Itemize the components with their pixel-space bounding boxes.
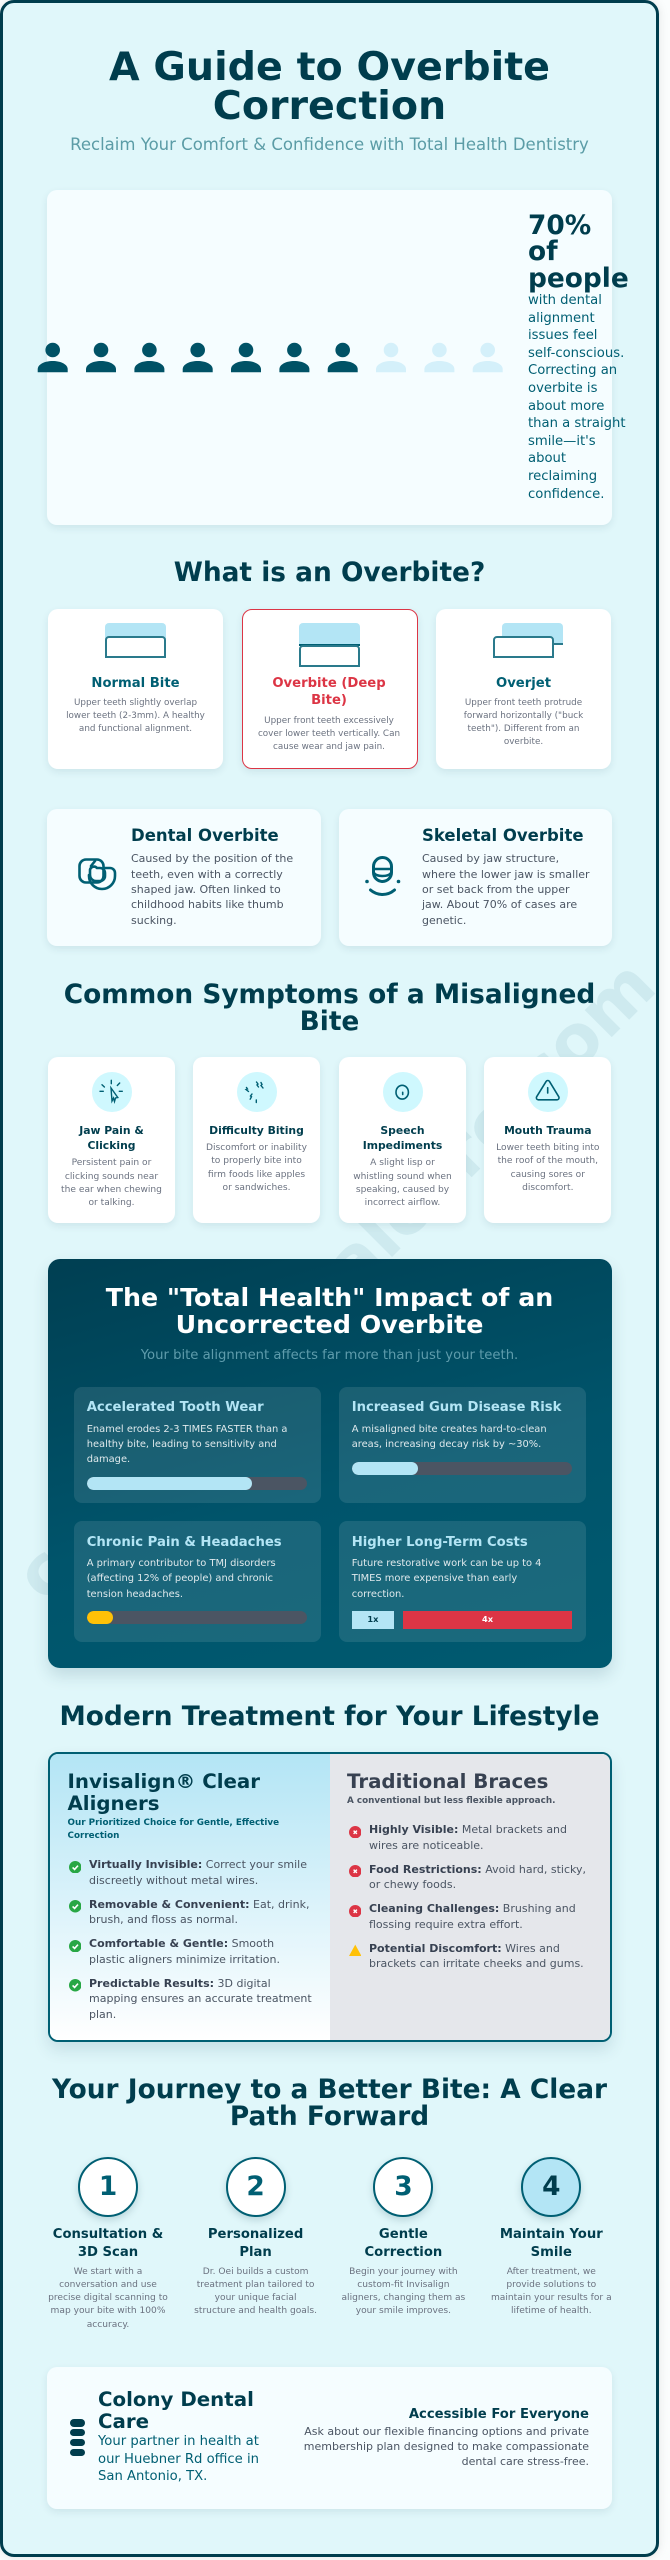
statistic text: about more xyxy=(528,399,604,414)
description xyxy=(352,1424,547,1450)
statistic headline: of xyxy=(528,236,558,267)
drawback: Potential Discomfort: Wires and xyxy=(369,1942,560,1955)
benefit xyxy=(69,1858,307,1887)
number badge: 3 xyxy=(394,2171,413,2202)
description xyxy=(353,1158,452,1208)
description: Upper front teeth protrude xyxy=(465,698,582,708)
infographic frame: colonydentalcare.com xyxy=(0,944,659,1616)
card: mouth trauma xyxy=(484,1057,611,1223)
description: provide solutions to xyxy=(506,2280,596,2290)
number badge xyxy=(78,2157,138,2217)
description: Persistent pain or xyxy=(72,1158,151,1168)
practice location: San Antonio, TX. xyxy=(98,2469,207,2484)
card: tooth wear xyxy=(74,1387,320,1503)
heading: Maintain Your xyxy=(500,2227,603,2242)
statistic text xyxy=(528,293,626,502)
description: Upper teeth slightly overlap xyxy=(74,698,197,708)
heading: journey xyxy=(52,2074,607,2132)
practice location: our Huebner Rd office in xyxy=(98,2452,259,2467)
card: overjet xyxy=(436,609,611,769)
number badge xyxy=(226,2157,286,2217)
description xyxy=(86,1558,276,1600)
heading: common symptoms xyxy=(64,979,595,1037)
heading: Bite) xyxy=(311,693,347,708)
benefit: discreetly without metal wires. xyxy=(89,1874,258,1887)
description: forward horizontally ("buck xyxy=(464,711,583,721)
description xyxy=(131,852,293,927)
statistic text: overbite is xyxy=(528,381,597,396)
practice location: Your partner in health at xyxy=(98,2434,259,2449)
description xyxy=(422,852,590,927)
drawback: Highly Visible: Metal brackets and xyxy=(369,1823,567,1836)
description: discomfort. xyxy=(522,1183,574,1193)
heading xyxy=(68,1770,260,1815)
subheading: Our Prioritized Choice for Gentle, Effective xyxy=(68,1818,279,1828)
panel: dental overbite xyxy=(47,809,321,946)
number badge: 2 xyxy=(246,2171,265,2202)
panel: skeletal overbite xyxy=(338,809,612,946)
description: maintain your results for a xyxy=(491,2293,612,2303)
card: gum disease xyxy=(338,1387,586,1503)
heading xyxy=(38,2226,178,2261)
benefit: Predictable Results: 3D digital xyxy=(89,1977,271,1990)
heading: Uncorrected Overbite xyxy=(176,1310,483,1339)
heading: journey: Path Forward xyxy=(230,2101,429,2132)
pictogram: 7 of 10 people xyxy=(38,342,503,372)
panel: total health impact xyxy=(48,1259,612,1668)
accessibility text: dental care stress-free. xyxy=(462,2455,589,2468)
step 4 xyxy=(481,2157,621,2339)
description: healthy bite, leading to sensitivity and xyxy=(87,1439,277,1450)
accessibility text: Ask about our flexible financing options and private xyxy=(304,2425,589,2438)
description: aligners, changing them as xyxy=(341,2293,465,2303)
heading: Aligners xyxy=(68,1792,160,1815)
description xyxy=(186,2266,326,2318)
description: childhood habits like thumb xyxy=(131,898,284,911)
statistic headline: 70% xyxy=(528,210,591,241)
statistic text: self-conscious. xyxy=(528,346,624,361)
statistic text: smile—it's xyxy=(528,434,596,449)
description: A misaligned bite creates hard-to-clean xyxy=(352,1424,547,1434)
heading xyxy=(186,2226,326,2261)
description: your smile improves. xyxy=(356,2306,451,2316)
icon: jaw xyxy=(365,856,400,896)
heading: journey: Your Journey to a Better Bite: A Clear xyxy=(52,2074,607,2105)
drawback: brackets can irritate cheeks and gums. xyxy=(369,1957,584,1970)
heading: 3D Scan xyxy=(78,2245,138,2260)
number badge xyxy=(373,2157,433,2217)
description: lower teeth (2-3mm). A healthy xyxy=(66,711,205,721)
number badge: 4 xyxy=(542,2171,560,2202)
heading: Gentle xyxy=(379,2227,428,2242)
drawback: flossing require extra effort. xyxy=(369,1918,523,1931)
description: conversation and use xyxy=(59,2280,157,2290)
subheading xyxy=(68,1818,279,1841)
statistic text: Correcting an xyxy=(528,363,617,378)
subheading: A conventional but less flexible approach. xyxy=(347,1796,555,1806)
statistic headline: people xyxy=(528,263,629,294)
benefit: plastic aligners minimize irritation. xyxy=(89,1953,280,1966)
description: incorrect airflow. xyxy=(365,1198,440,1208)
drawback: or chewy foods. xyxy=(369,1878,456,1891)
practice name: Care xyxy=(98,2410,149,2433)
description: overbite. xyxy=(504,737,543,747)
benefit: plan. xyxy=(89,2008,116,2021)
heading: what is an overbite: What is an Overbite? xyxy=(174,557,485,588)
description: lifetime of health. xyxy=(511,2306,592,2316)
description: Dr. Oei builds a custom xyxy=(203,2267,308,2277)
heading xyxy=(481,2226,621,2261)
heading: Mouth Trauma xyxy=(504,1124,592,1137)
icon: logo xyxy=(70,2419,85,2457)
step 1 xyxy=(48,2157,168,2330)
heading: common symptoms: Bite xyxy=(300,1006,359,1037)
description: TIMES more expensive than early xyxy=(352,1573,517,1584)
description: genetic. xyxy=(422,914,466,927)
heading: Overbite (Deep xyxy=(272,676,386,691)
description xyxy=(66,698,205,734)
icon: teeth xyxy=(78,858,116,890)
description: clicking sounds near xyxy=(65,1172,158,1182)
panel: treatment comparison xyxy=(48,1752,612,2042)
heading: Normal Bite xyxy=(91,676,180,690)
benefit: brush, and floss as normal. xyxy=(89,1913,238,1926)
progress bar 75% xyxy=(87,1477,307,1490)
statistic text: issues feel xyxy=(528,328,597,343)
statistic text: reclaiming xyxy=(528,469,597,484)
description: A slight lisp or xyxy=(370,1158,435,1168)
progress bar 30% xyxy=(352,1462,572,1475)
benefit: Removable & Convenient: Eat, drink, xyxy=(89,1898,309,1911)
description: Discomfort or inability xyxy=(206,1143,307,1153)
description: firm foods like apples xyxy=(208,1170,305,1180)
heading: Personalized xyxy=(208,2227,303,2242)
heading: Dental Overbite xyxy=(131,826,279,845)
benefit xyxy=(69,1898,309,1926)
icon: jaw pain xyxy=(92,1072,132,1112)
description: your unique facial xyxy=(215,2293,296,2303)
icon: warning xyxy=(528,1072,568,1112)
title: A Guide to Overbite xyxy=(109,44,550,90)
heading: common symptoms: Common Symptoms of a Misaligned xyxy=(64,979,595,1010)
cost bar 4x: 4x xyxy=(482,1614,493,1624)
description: causing sores or xyxy=(511,1170,585,1180)
description: to properly bite into xyxy=(211,1156,302,1166)
icon: speech xyxy=(383,1072,422,1112)
statistic headline xyxy=(528,210,629,294)
card: difficulty biting xyxy=(193,1057,320,1223)
benefit: mapping ensures an accurate treatment xyxy=(89,1992,312,2005)
description: the ear when chewing xyxy=(61,1185,162,1195)
description: map your bite with 100% xyxy=(51,2306,165,2316)
heading: Higher Long-Term Costs xyxy=(352,1535,528,1550)
cost bar 1x: 1x xyxy=(367,1614,378,1624)
description xyxy=(496,1143,599,1193)
heading: modern treatment: Modern Treatment for Your Lifestyle xyxy=(60,1700,599,1732)
description: (affecting 12% of people) and chronic xyxy=(87,1573,273,1584)
heading: Speech xyxy=(380,1124,425,1137)
drawback: Food Restrictions: Avoid hard, sticky, xyxy=(369,1863,586,1876)
description: the roof of the mouth, xyxy=(498,1156,598,1166)
step 3 xyxy=(333,2157,473,2339)
description xyxy=(61,1158,162,1208)
description xyxy=(258,716,400,752)
description: Enamel erodes 2-3 TIMES FASTER than a xyxy=(87,1424,287,1434)
description xyxy=(38,2266,178,2332)
description xyxy=(87,1424,287,1465)
drawback xyxy=(349,1902,576,1931)
title xyxy=(109,44,550,129)
description: structure and health goals. xyxy=(194,2306,317,2316)
benefit xyxy=(69,1937,280,1966)
description: and functional alignment. xyxy=(79,724,192,734)
accessibility text: membership plan designed to make compassionate xyxy=(304,2440,589,2453)
cost bar 1x xyxy=(352,1611,394,1629)
heading: Increased Gum Disease Risk xyxy=(352,1400,561,1415)
card: chronic pain xyxy=(74,1521,320,1642)
statistic text: alignment xyxy=(528,311,595,326)
heading xyxy=(106,1283,553,1339)
description: jaw. About 70% of cases are xyxy=(422,898,577,911)
heading: Overjet xyxy=(496,676,551,690)
description: whistling sound when xyxy=(353,1172,452,1182)
description: correction. xyxy=(352,1589,404,1600)
benefit: Comfortable & Gentle: Smooth xyxy=(89,1937,274,1950)
heading: Impediments xyxy=(363,1139,442,1152)
heading xyxy=(78,1124,144,1152)
heading: Correction xyxy=(364,2245,442,2260)
description: cover lower teeth vertically. Can xyxy=(258,729,400,739)
benefit: Virtually Invisible: Correct your smile xyxy=(89,1858,307,1871)
card: overbite xyxy=(242,609,418,769)
diagram: overjet xyxy=(493,623,563,658)
panel: footer xyxy=(47,2367,612,2509)
benefit xyxy=(69,1977,312,2021)
description: where the lower jaw is smaller xyxy=(422,868,590,881)
statistic text: with dental xyxy=(528,293,602,308)
number badge: 1 xyxy=(99,2171,117,2202)
description xyxy=(206,1143,307,1193)
practice name: Colony Dental xyxy=(98,2388,254,2411)
description: precise digital scanning to xyxy=(48,2293,168,2303)
description xyxy=(333,2266,473,2318)
description: teeth"). Different from an xyxy=(468,724,579,734)
card: speech impediments xyxy=(339,1057,466,1223)
progress bar 12% xyxy=(87,1611,307,1624)
heading: Accelerated Tooth Wear xyxy=(87,1400,264,1415)
description: We start with a xyxy=(74,2267,142,2277)
description: or talking. xyxy=(88,1198,135,1208)
drawback xyxy=(349,1942,584,1970)
heading: Traditional Braces xyxy=(347,1770,548,1793)
practice location xyxy=(98,2433,259,2486)
heading xyxy=(272,676,386,708)
description: custom-fit Invisalign xyxy=(357,2280,450,2290)
drawback: Cleaning Challenges: Brushing and xyxy=(369,1902,576,1915)
statistic text: about xyxy=(528,451,566,466)
column: traditional braces xyxy=(330,1754,610,2040)
description: sucking. xyxy=(131,914,177,927)
description xyxy=(352,1558,541,1600)
subheading: Your bite alignment affects far more than just your teeth. xyxy=(141,1348,518,1363)
subheading: Correction xyxy=(68,1831,119,1841)
subtitle: Reclaim Your Comfort & Confidence with Total Health Dentistry xyxy=(70,134,589,154)
accessibility text xyxy=(304,2424,589,2470)
drawback: wires are noticeable. xyxy=(369,1839,484,1852)
description: tension headaches. xyxy=(87,1589,183,1600)
description: A primary contributor to TMJ disorders xyxy=(87,1558,276,1569)
description: Upper front teeth excessively xyxy=(264,716,394,726)
description: Lower teeth biting into xyxy=(496,1143,599,1153)
heading: Smile xyxy=(531,2245,572,2260)
card: normal bite xyxy=(48,609,223,769)
statistic text: confidence. xyxy=(528,487,604,502)
statistic text: than a straight xyxy=(528,416,626,431)
heading: Skeletal Overbite xyxy=(422,826,584,845)
cost bar 4x xyxy=(403,1611,572,1629)
description: Future restorative work can be up to 4 xyxy=(352,1558,541,1569)
heading: The "Total Health" Impact of an xyxy=(106,1283,553,1312)
description: cause wear and jaw pain. xyxy=(273,742,385,752)
description: speaking, caused by xyxy=(356,1185,449,1195)
step 2 xyxy=(186,2157,326,2339)
description: areas, increasing decay risk by ~30%. xyxy=(352,1439,541,1450)
heading: Invisalign® Clear xyxy=(68,1770,260,1793)
heading: Jaw Pain & xyxy=(79,1124,144,1137)
description: damage. xyxy=(87,1454,130,1465)
number badge xyxy=(521,2157,581,2217)
description: Caused by the position of the xyxy=(131,852,293,865)
description: After treatment, we xyxy=(507,2267,596,2277)
description: or sandwiches. xyxy=(222,1183,290,1193)
icon: difficulty biting xyxy=(237,1072,276,1112)
heading: Chronic Pain & Headaches xyxy=(87,1535,282,1550)
heading: Difficulty Biting xyxy=(209,1124,304,1137)
description: Caused by jaw structure, xyxy=(422,852,559,865)
diagram: overbite xyxy=(299,623,360,667)
drawback xyxy=(349,1823,567,1852)
card: long-term costs xyxy=(338,1521,586,1642)
description: accuracy. xyxy=(87,2320,129,2330)
diagram: normal bite xyxy=(105,623,166,658)
description: teeth, even with a correctly xyxy=(131,868,283,881)
title: Correction xyxy=(213,83,446,129)
card: jaw pain xyxy=(48,1057,175,1223)
description xyxy=(481,2266,621,2318)
column: invisalign xyxy=(50,1754,330,2040)
heading: Plan xyxy=(239,2245,272,2260)
accessibility heading: Accessible For Everyone xyxy=(409,2407,589,2422)
description: treatment plan tailored to xyxy=(197,2280,314,2290)
heading xyxy=(363,1124,442,1152)
description: or set back from the upper xyxy=(422,883,570,896)
description xyxy=(464,698,584,747)
drawback xyxy=(349,1863,586,1891)
heading: Clicking xyxy=(87,1139,136,1152)
description: shaped jaw. Often linked to xyxy=(131,883,281,896)
heading: Consultation & xyxy=(53,2227,163,2242)
heading xyxy=(333,2226,473,2261)
practice name xyxy=(98,2389,254,2433)
description: Begin your journey with xyxy=(349,2267,458,2277)
panel: 70 percent statistic xyxy=(47,190,612,525)
